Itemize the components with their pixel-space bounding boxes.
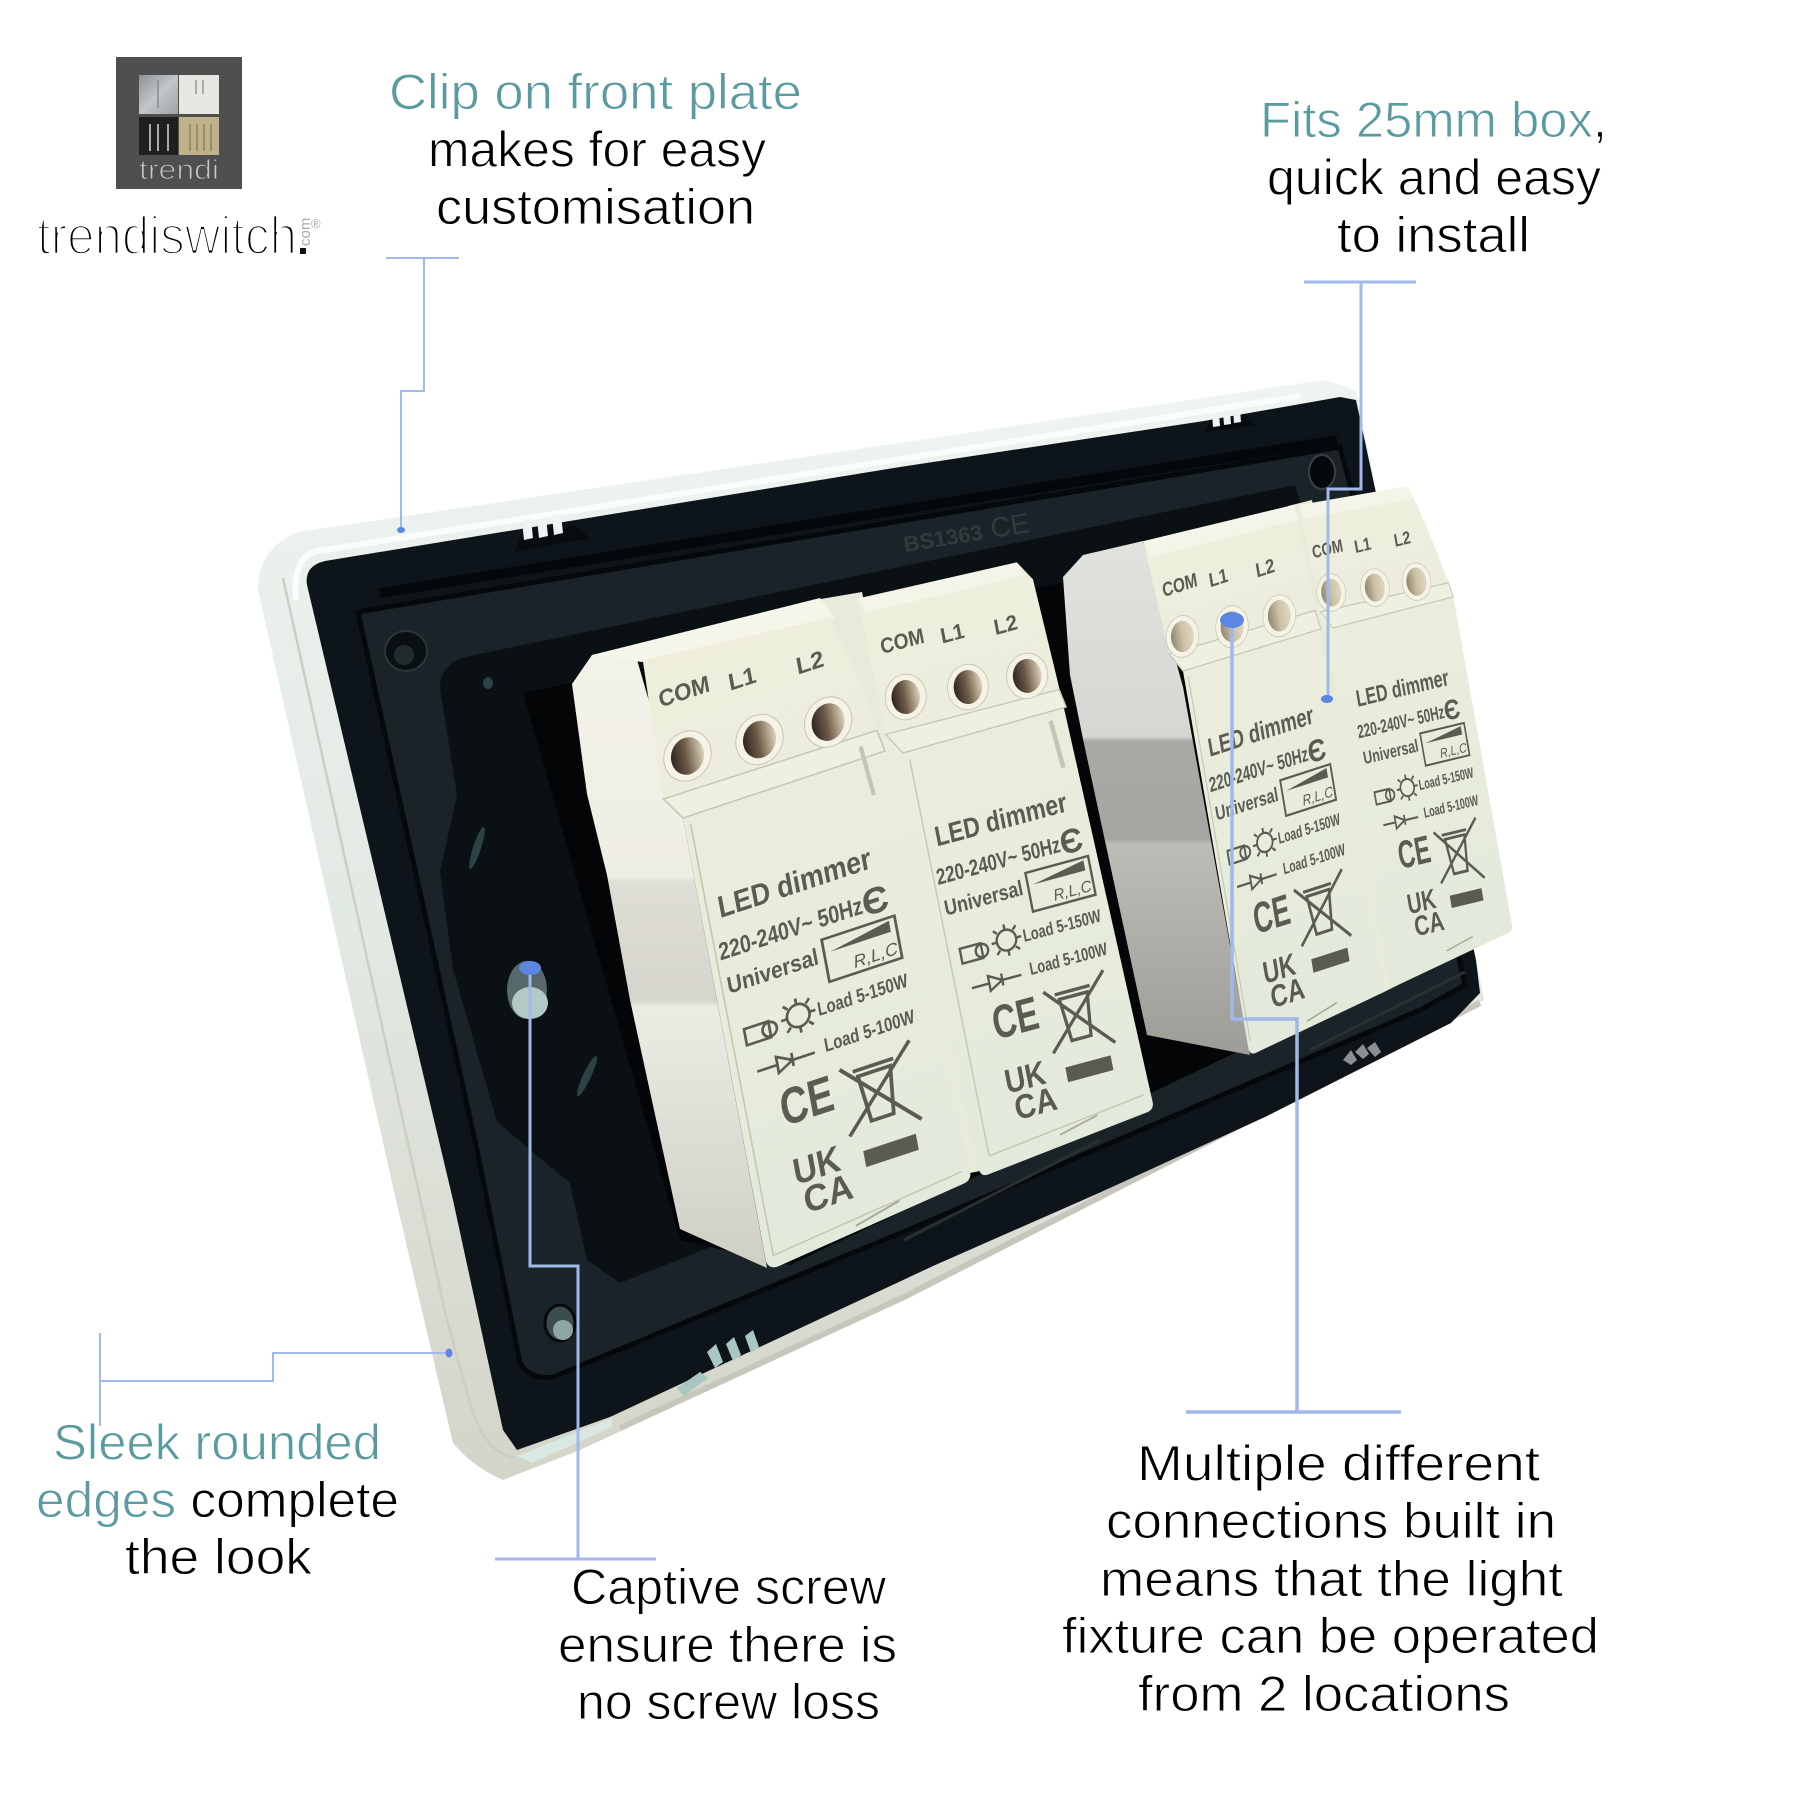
callout: clip on front plate: Clip on front plate (389, 64, 802, 120)
module 4 body: CA (1412, 906, 1447, 943)
callout: multiple connections (1062, 1436, 1599, 1722)
callout: fits 25mm box (1260, 92, 1607, 263)
callout: sleek rounded edges: Sleek rounded (53, 1414, 381, 1470)
callout: multiple connections: fixture can be operated (1062, 1608, 1599, 1664)
module 3: face (1143, 490, 1388, 1062)
module 2 body: COM (878, 624, 926, 659)
module 2 body: CA (1011, 1080, 1060, 1128)
module 3: face: L2 (1254, 553, 1276, 582)
module 1: face: CA (800, 1165, 856, 1221)
module 2 body (850, 548, 1158, 1181)
clip: top right (1205, 409, 1255, 432)
module 3: face: R,L,C (1301, 783, 1334, 809)
module 2 body: Universal (942, 877, 1025, 921)
callout: multiple connections: means that the light (1100, 1551, 1563, 1607)
module 2 body: Load 5-150W (1021, 905, 1103, 946)
callout: clip on front plate: makes for easy (428, 122, 766, 178)
logo: trendiswitch wordmark: ® (311, 216, 321, 231)
module 2 body: Load 5-100W (1028, 938, 1109, 979)
callout: captive screw: Captive screw (571, 1559, 887, 1615)
plate: bottom left tab (517, 1418, 612, 1463)
module 3: face: Load 5-150W (1277, 810, 1342, 848)
module 4 body: Universal (1362, 736, 1420, 769)
plate: black mounting recess (523, 530, 1430, 1265)
module 3 side and body (1063, 490, 1388, 1062)
module 3: face: L1 (1207, 563, 1230, 592)
module 2 body: CE (988, 986, 1043, 1050)
product photo illustration (258, 380, 1518, 1480)
callout: fits 25mm box: to install (1337, 207, 1530, 263)
module 3: face: CA (1268, 971, 1307, 1016)
plate: inner dark recess (440, 485, 1440, 1283)
callout: multiple connections: from 2 locations (1138, 1666, 1510, 1722)
plate: outer white frame (258, 380, 1484, 1480)
clip: bottom left (677, 1330, 759, 1396)
module 1: face: R,L,C (852, 938, 900, 972)
module 4 body: 220-240V~ 50Hz (1356, 702, 1446, 743)
module 1: face: Load 5-100W (822, 1006, 917, 1057)
leader: sleek rounded edges (100, 1333, 452, 1426)
clip: bottom right (1343, 1042, 1381, 1065)
plate: dark back box frame (307, 397, 1480, 1450)
callout: clip on front plate (389, 64, 802, 235)
callout: sleek rounded edges: the look (125, 1529, 313, 1585)
module 1: face: LED dimmer (715, 841, 874, 925)
logo: trendiswitch wordmark: trendiswitch (37, 206, 297, 266)
callout: captive screw: ensure there is (558, 1617, 897, 1673)
module 2 body: L1 (939, 619, 967, 649)
standard marking: BS1363 (902, 520, 984, 557)
module 4 body: COM (1311, 536, 1344, 563)
module 1 side and body (572, 588, 976, 1275)
module 1: face: UK (790, 1137, 844, 1193)
module 4 body: Є (1442, 693, 1463, 727)
plate: left edge crease (283, 578, 515, 1458)
callout: fits 25mm box: quick and easy (1267, 150, 1601, 206)
module 3: face: Load 5-100W (1282, 841, 1347, 879)
module 1: face: Є (858, 876, 892, 925)
screw hole: top right (1309, 455, 1335, 489)
module 4 body: LED dimmer (1354, 665, 1451, 712)
module 2 body: Є (1057, 820, 1086, 863)
callout: clip on front plate: customisation (436, 179, 755, 235)
module 4 body: Load 5-100W (1422, 792, 1480, 821)
module 2 body: L2 (992, 611, 1020, 640)
captive screw highlight (512, 987, 548, 1019)
captive screw opening (507, 961, 547, 1019)
neck joining modules 1 and 2 (815, 592, 985, 1174)
module 3: face: Є (1305, 731, 1329, 771)
module 1: face: L1 (726, 662, 758, 697)
module 1: face: Universal (725, 944, 821, 1000)
module 4 body: UK (1405, 884, 1439, 921)
module 2 body: LED dimmer (932, 786, 1070, 853)
module 3: face: COM (1160, 568, 1199, 601)
plate: moulding highlights (466, 677, 600, 1098)
neck joining modules 3 and 4 (1288, 500, 1398, 994)
module 2 body: UK (1002, 1054, 1049, 1102)
module 1: face: CE (775, 1065, 838, 1138)
module 4 body: L1 (1353, 534, 1373, 557)
module 3: side wall (1063, 541, 1250, 1055)
module 4 body (1298, 473, 1518, 989)
module 1: face: COM (656, 671, 712, 713)
module 4 body: CE (1395, 828, 1434, 878)
module 1: side wall (572, 646, 767, 1268)
plate: lower grooves (904, 972, 1465, 1240)
module 1: face (638, 588, 976, 1275)
callout: multiple connections: connections built in (1106, 1493, 1556, 1549)
screw hole: bottom left (545, 1305, 575, 1341)
plate: bottom edge shading (620, 1003, 1480, 1428)
module 1: face: L2 (794, 646, 826, 681)
module 1: top bracket (592, 598, 835, 662)
plate: inner lip (295, 396, 1300, 600)
screw hole: top left (385, 631, 427, 671)
plate: raised moulded frame (358, 447, 1465, 1377)
module 4 body: Load 5-150W (1418, 764, 1475, 793)
callout: sleek rounded edges: edges complete (36, 1472, 399, 1528)
module 2 body: R,L,C (1052, 878, 1094, 905)
logo: trendi square badge: trendi (139, 154, 219, 185)
module 3: face: 220-240V~ 50Hz (1208, 743, 1310, 798)
callout: captive screw (558, 1559, 897, 1730)
callout: fits 25mm box: Fits 25mm box, (1260, 92, 1607, 148)
leader: fits 25mm box (1304, 282, 1416, 703)
leader: clip on front plate (386, 258, 459, 533)
module 4 body: L2 (1392, 528, 1412, 551)
leader: multiple connections (1186, 612, 1401, 1412)
module 1: face: 220-240V~ 50Hz (716, 892, 865, 966)
module 1: face: Load 5-150W (816, 970, 910, 1021)
callout: captive screw: no screw loss (577, 1674, 880, 1730)
module 4 body: R,L,C (1439, 740, 1468, 761)
module 3: face: Universal (1214, 782, 1280, 825)
plate: top groove (380, 440, 1337, 593)
callout: sleek rounded edges (36, 1414, 399, 1585)
module 3: face: CE (1250, 886, 1294, 944)
leader: captive screw (495, 961, 656, 1559)
standard marking (902, 507, 1031, 557)
logo: trendi square badge (116, 57, 242, 189)
callout: multiple connections: Multiple different (1137, 1436, 1540, 1492)
logo: trendiswitch wordmark: com (297, 218, 314, 246)
module 3: face: LED dimmer (1206, 701, 1316, 763)
standard marking: CE (988, 507, 1031, 544)
clip: top left (515, 514, 590, 552)
module 3: face: UK (1260, 947, 1298, 992)
module 2 body: 220-240V~ 50Hz (934, 832, 1062, 890)
